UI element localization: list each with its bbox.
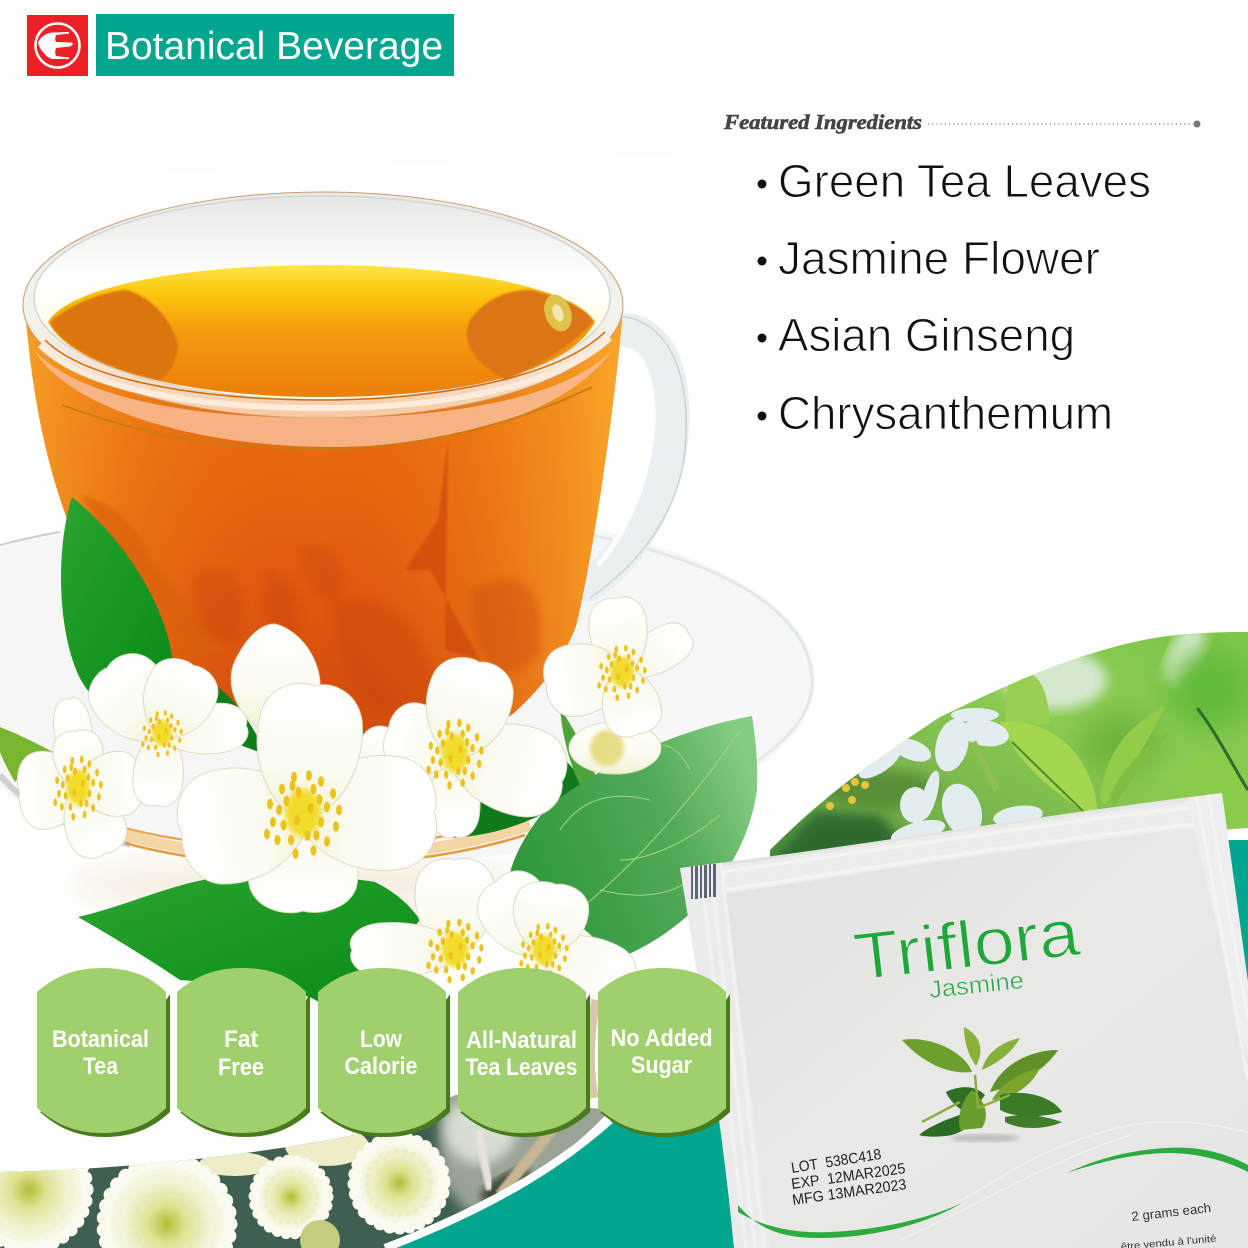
upper glass wall	[34, 196, 610, 400]
leaf: upper left	[61, 497, 173, 693]
feature badge: Botanical Tea: Tea	[83, 1053, 119, 1080]
ingredient: asian ginseng: Asian Ginseng	[778, 309, 1075, 361]
side seals	[680, 862, 734, 1247]
brand logo	[27, 15, 88, 76]
tea surface	[48, 265, 595, 397]
sachet: Triflora Jasmine	[680, 793, 1248, 1248]
blossoms	[854, 708, 1044, 849]
leaf: large right	[509, 716, 757, 960]
flower: jasmine lower pair	[350, 858, 643, 1011]
cup handle	[588, 316, 686, 598]
batch codes: MFG 13MAR2023	[791, 1176, 907, 1209]
ingredients list	[758, 155, 1151, 439]
feature badge: No Added Sugar	[598, 968, 730, 1137]
teal swoosh panel	[385, 840, 1248, 1248]
top seal	[724, 840, 904, 894]
flower: jasmine centre large	[170, 679, 437, 913]
flower: chrysanthemum large	[104, 1161, 230, 1248]
ingredient: chrysanthemum: Chrysanthemum	[778, 387, 1113, 439]
ingredient: green tea leaves: Green Tea Leaves	[778, 155, 1151, 207]
tea leaf sprig icon	[902, 1027, 1062, 1142]
leaf: behind right flower	[450, 735, 582, 838]
batch codes: LOT 538C418	[790, 1146, 883, 1177]
flower: jasmine bud	[231, 624, 320, 732]
ingredient: jasmine flower: Jasmine Flower	[778, 232, 1100, 284]
feature badge: All-Natural Tea Leaves: All-Natural	[466, 1027, 577, 1054]
flower: jasmine far left	[15, 695, 144, 865]
category banner	[96, 14, 454, 76]
wave lines	[738, 1203, 962, 1238]
category banner: Botanical Beverage	[105, 25, 443, 68]
ginseng root behind pills	[590, 1000, 596, 1098]
glass rim	[23, 192, 623, 418]
feature badge: Low Calorie: Calorie	[344, 1053, 418, 1080]
flower: chrysanthemum small	[254, 1160, 328, 1234]
feature badge: All-Natural Tea Leaves	[458, 968, 590, 1137]
cup body with tea	[20, 300, 630, 740]
leaf: behind left flower	[205, 680, 267, 755]
photo: chrysanthemums and ginseng	[0, 1095, 604, 1248]
feature badge: Low Calorie	[318, 968, 450, 1137]
feature badge: Low Calorie: Low	[360, 1026, 402, 1053]
flower: chrysanthemum	[0, 1168, 94, 1248]
flower: jasmine right	[376, 649, 576, 838]
photo: tea leaves and white blossoms	[770, 632, 1248, 856]
feature badge: No Added Sugar: No Added	[610, 1025, 712, 1052]
feature badge: Botanical Tea	[37, 968, 170, 1137]
variant name: Jasmine	[928, 967, 1025, 1004]
flower: jasmine small behind	[358, 726, 402, 778]
feature badge: Fat Free: Free	[218, 1054, 264, 1081]
leaf: far left	[0, 727, 53, 782]
saucer shadow	[70, 857, 530, 913]
glass tea cup	[20, 192, 630, 740]
feature badge: All-Natural Tea Leaves: Tea Leaves	[466, 1054, 578, 1081]
featured ingredients heading: Featured Ingredients	[723, 110, 922, 134]
feature badge: Fat Free: Fat	[224, 1026, 258, 1053]
glass saucer	[0, 530, 815, 865]
front wall reflection	[34, 350, 612, 447]
rim lip line	[45, 332, 605, 400]
brand name: Triflora	[850, 895, 1083, 994]
feature badge: No Added Sugar: Sugar	[631, 1052, 692, 1079]
feature badge: Fat Free	[177, 968, 310, 1137]
flower: jasmine left	[76, 641, 250, 809]
featured ingredients heading	[723, 110, 1200, 134]
leaf: small upper right stem	[560, 708, 598, 785]
barcode	[691, 864, 716, 899]
leaf: bottom	[78, 877, 420, 1005]
surface reflections	[50, 290, 593, 380]
feature badge: Botanical Tea: Botanical	[52, 1026, 149, 1053]
batch codes	[790, 1146, 907, 1209]
net weight: 2 grams each	[1131, 1200, 1212, 1224]
flower: jasmine upper right	[539, 595, 700, 774]
batch codes: EXP 12MAR2025	[790, 1160, 906, 1193]
flower: chrysanthemum right	[354, 1138, 444, 1228]
